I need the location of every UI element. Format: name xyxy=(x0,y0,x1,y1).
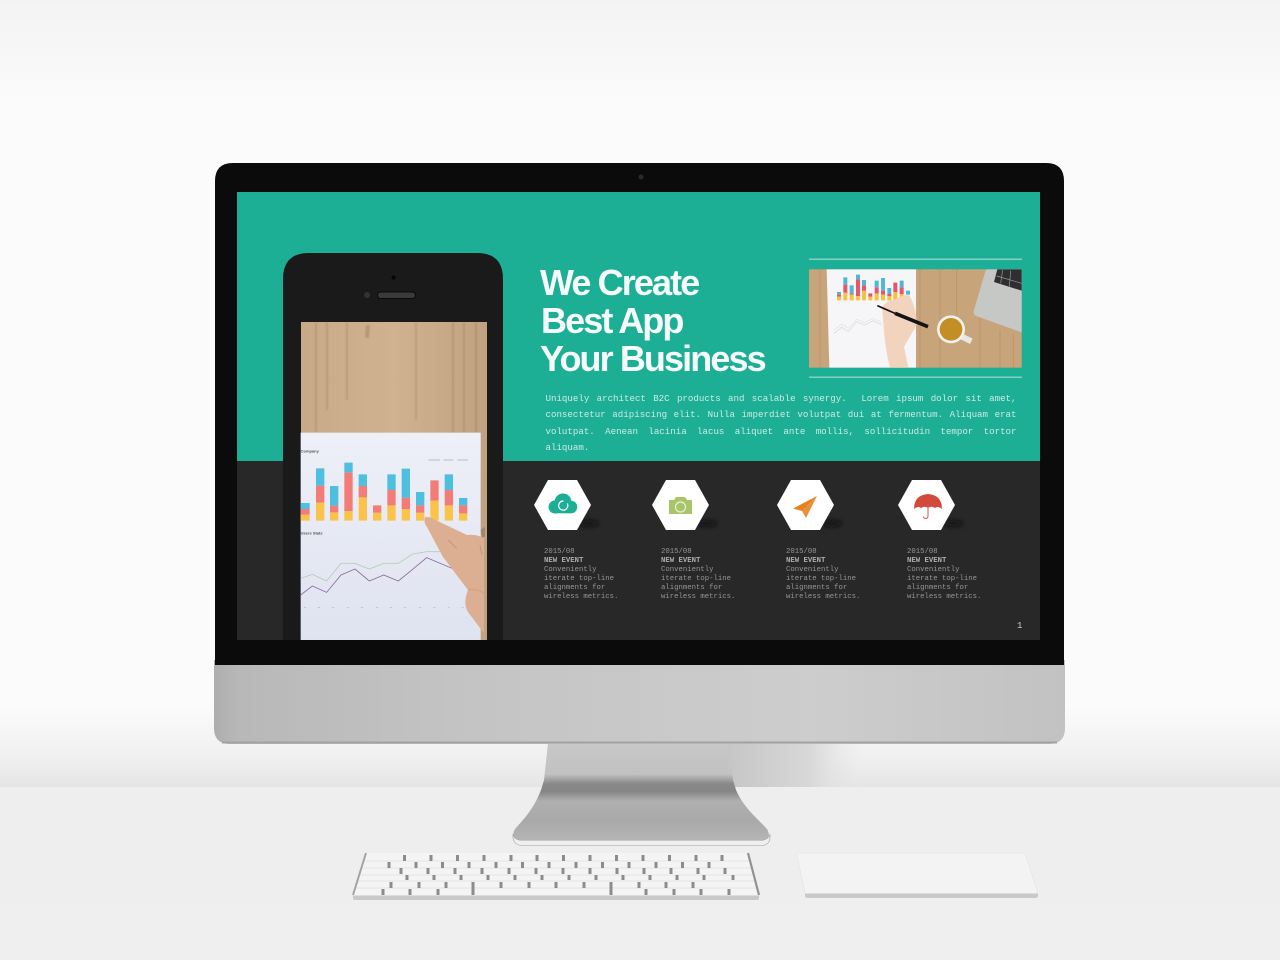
keyboard row seams xyxy=(355,861,757,888)
paragraph xyxy=(546,392,1016,453)
chart legend xyxy=(428,458,468,461)
monitor stand xyxy=(513,743,770,846)
event 1 icon xyxy=(534,480,599,530)
axis ticks xyxy=(304,607,464,609)
paragraph: volutpat. Aenean lacinia lacus aliquet ante mollis, sollicitudin tempor tortor xyxy=(546,426,1016,437)
slide: teal top panel xyxy=(237,192,1040,461)
keyboard key gaps xyxy=(382,855,734,895)
chart labels: Company xyxy=(301,448,320,453)
icon: camera xyxy=(669,497,692,514)
event 3 icon xyxy=(777,480,842,530)
monitor xyxy=(214,163,1065,744)
chart labels xyxy=(301,448,323,536)
icon: umbrella xyxy=(914,494,942,518)
photo: desk with chart and coffee xyxy=(809,269,1022,368)
monitor chin xyxy=(214,660,1065,744)
icon: cloud refresh xyxy=(548,494,577,514)
hand xyxy=(882,295,917,368)
chart paper xyxy=(301,433,485,640)
event 1 text: 2015/08 NEW EVENT Conveniently iterate top-line alignments for wireless metrics. xyxy=(544,548,618,600)
event 2 icon xyxy=(652,480,717,530)
title: Your Business xyxy=(540,338,766,379)
keyboard xyxy=(353,853,759,900)
photo frame lines xyxy=(809,258,1022,378)
paper xyxy=(827,269,916,368)
page number: 1 xyxy=(1017,621,1022,631)
laptop xyxy=(974,269,1022,332)
coffee cup xyxy=(937,315,973,344)
pen xyxy=(877,306,928,327)
webcam xyxy=(638,174,644,180)
event 4 text: 2015/08 NEW EVENT Conveniently iterate top-line alignments for wireless metrics. xyxy=(907,548,981,600)
title: Best App xyxy=(541,300,683,341)
event 3 text: 2015/08 NEW EVENT Conveniently iterate top-line alignments for wireless metrics. xyxy=(786,548,860,600)
paragraph: aliquam. xyxy=(546,442,589,453)
chart labels: Users Stats xyxy=(301,531,323,536)
trackpad xyxy=(797,853,1038,898)
slide: dark bottom panel xyxy=(237,461,1040,640)
bar chart xyxy=(301,463,467,521)
phone xyxy=(283,253,503,640)
phone screen photo xyxy=(301,322,487,640)
title xyxy=(540,262,766,379)
finger and hand xyxy=(424,517,485,632)
mini bars xyxy=(837,291,904,300)
icon: paper plane xyxy=(793,496,817,518)
phone sensor xyxy=(364,292,370,298)
phone speaker xyxy=(378,292,416,298)
monitor bezel xyxy=(215,163,1064,665)
title: We Create xyxy=(540,262,699,303)
event 2 text: 2015/08 NEW EVENT Conveniently iterate top-line alignments for wireless metrics. xyxy=(661,548,735,600)
paragraph: Uniquely architect B2C products and scalable synergy. Lorem ipsum dolor sit amet, xyxy=(546,392,1016,404)
event 4 icon xyxy=(898,480,963,530)
line chart xyxy=(301,552,456,595)
phone body xyxy=(283,253,503,640)
paragraph: consectetur adipiscing elit. Nulla imperdiet volutpat dui at fermentum. Aliquam erat xyxy=(546,409,1016,420)
phone camera xyxy=(392,276,396,280)
